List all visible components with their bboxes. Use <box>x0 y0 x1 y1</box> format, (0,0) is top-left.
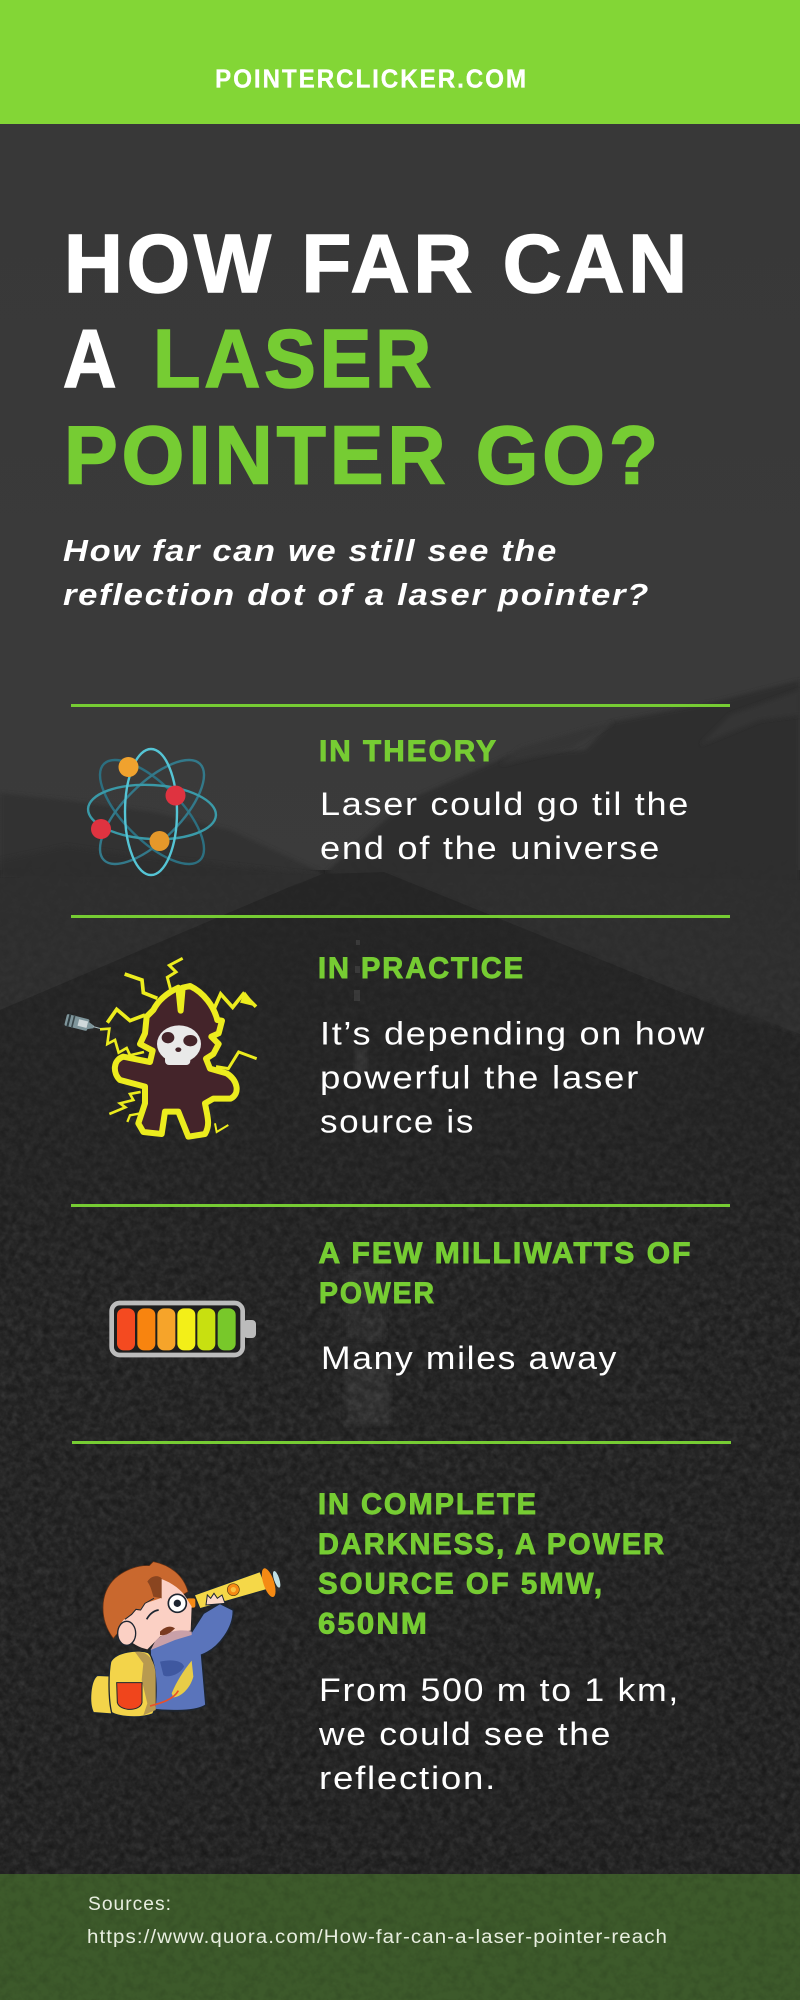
heading: few milliwatts: A FEW MILLIWATTS OF <box>318 1237 692 1270</box>
eye <box>168 1594 186 1612</box>
body: few milliwatts: Many miles away <box>321 1340 618 1376</box>
skull <box>157 1025 201 1065</box>
bolts <box>100 958 257 1132</box>
heading: complete darkness: 650NM <box>318 1608 429 1640</box>
heading: in practice: IN PRACTICE <box>318 952 525 985</box>
heading: complete darkness: DARKNESS, A POWER <box>318 1528 666 1561</box>
icon: battery <box>112 1303 256 1355</box>
icon: atom <box>84 744 220 880</box>
body: in theory: Laser could go til the <box>320 786 690 822</box>
body: in practice: powerful the laser <box>320 1060 640 1096</box>
body <box>115 986 237 1137</box>
heading: in theory: IN THEORY <box>319 735 498 768</box>
title: LASER <box>153 312 435 405</box>
icon: syringe <box>64 1013 103 1035</box>
background: dark road photo <box>0 682 800 1874</box>
body: in theory <box>320 786 690 866</box>
sources text: https://www.quora.com/How-far-can-a-laser-pointer-reach <box>87 1927 668 1948</box>
sources text: Sources: <box>88 1894 172 1915</box>
body: complete darkness: reflection. <box>319 1760 497 1796</box>
heading: complete darkness: SOURCE OF 5MW, <box>318 1568 604 1600</box>
subtitle <box>63 533 650 612</box>
body: complete darkness <box>318 1672 680 1796</box>
panel: in practice <box>64 952 706 1140</box>
head <box>120 1578 192 1649</box>
icon: electrocuted skull character <box>64 958 257 1137</box>
body: complete darkness: From 500 m to 1 km, <box>319 1672 680 1708</box>
panel: in theory <box>84 735 690 880</box>
subtitle: How far can we still see the <box>63 533 558 568</box>
body: complete darkness: we could see the <box>318 1716 612 1752</box>
body: in practice <box>320 1016 706 1140</box>
icon: kid with telescope <box>91 1562 282 1717</box>
backpack pouch <box>91 1675 112 1714</box>
subtitle: reflection dot of a laser pointer? <box>63 577 650 612</box>
heading: complete darkness: IN COMPLETE <box>318 1488 538 1521</box>
title <box>63 217 691 502</box>
heading: few milliwatts: POWER <box>319 1277 436 1310</box>
body: in practice: source is <box>320 1104 475 1140</box>
divider lines <box>71 704 731 1444</box>
title: A <box>63 312 120 405</box>
hand <box>206 1593 225 1605</box>
hair <box>103 1562 188 1638</box>
panel: complete darkness <box>91 1488 680 1796</box>
body: in practice: It’s depending on how <box>320 1016 706 1052</box>
title: POINTER GO? <box>64 408 662 502</box>
footer: sources <box>0 1874 800 2000</box>
heading: complete darkness <box>318 1488 666 1640</box>
panel: few milliwatts <box>112 1237 693 1376</box>
body: in theory: end of the universe <box>320 830 661 866</box>
sources text <box>87 1894 668 1948</box>
ear <box>118 1621 136 1645</box>
title: HOW FAR CAN <box>64 217 691 310</box>
heading: few milliwatts <box>318 1237 692 1310</box>
header band <box>0 0 800 124</box>
backpack body <box>109 1651 156 1717</box>
site name: POINTERCLICKER.COM <box>215 64 528 94</box>
hoodie <box>150 1603 233 1711</box>
telescope <box>194 1572 267 1609</box>
